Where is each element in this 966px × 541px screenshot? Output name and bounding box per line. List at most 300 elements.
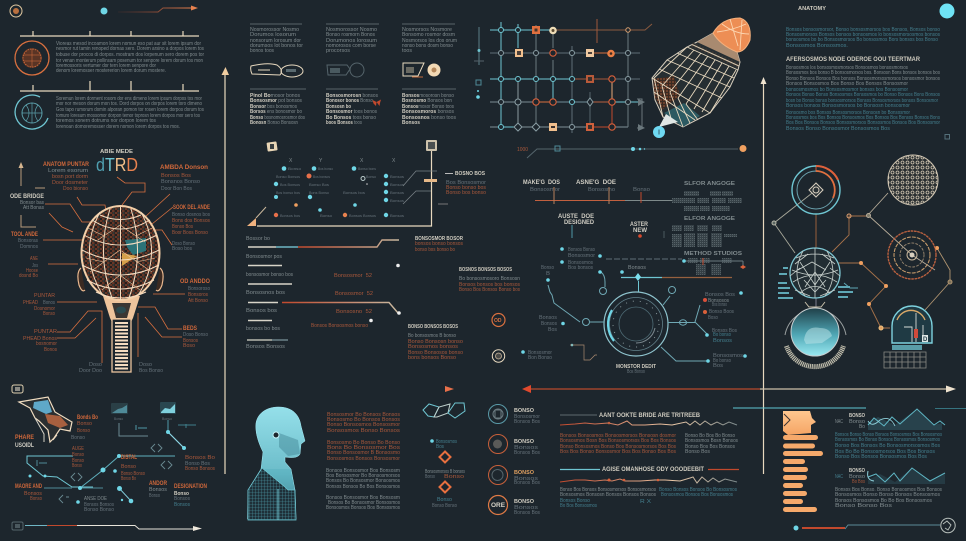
flow labels: Bonso (30, 496, 42, 502)
brain labels left: bosn port dorm (52, 174, 88, 180)
brain labels right: Bonsos Bos (161, 173, 192, 179)
text under wave one: Bonsos Bonsosmos Bonsosmorsos Bonsosn dosmor (560, 433, 676, 439)
gauge labels: Boso (708, 315, 718, 321)
column lower text: Bonsosn bo (326, 104, 351, 110)
icon: cyan globe (15, 95, 48, 129)
panel: four circle icons (488, 404, 540, 516)
brain labels left: PUNTAR (34, 293, 55, 299)
flow labels (15, 446, 215, 513)
brain labels left: ODE BRIDGE (10, 194, 44, 200)
chart one text: Bonsos Bonso Bonso Bonsos Bonsosmos Bos Bonsosmos (835, 432, 942, 438)
icon: glasses (251, 64, 303, 77)
bar six (247, 339, 398, 341)
icon row one (488, 404, 540, 425)
side label: Bonso bos bonso (446, 190, 486, 196)
brain labels right: Bos Bonso (139, 368, 163, 374)
node labels: Bonsos bos (280, 213, 300, 218)
gauge labels: Bo bonso (713, 332, 731, 338)
text block: right of bars one: bonsos bonso bonsos (415, 241, 463, 247)
icon: mini charts (111, 402, 176, 421)
text block: center bottom: Bonsosmos Bonsos Bonsosmor (327, 456, 400, 462)
icon: mini charts: Bonso (114, 416, 124, 421)
text block: center bottom: Bonso Bonsosmos Bonsosmor (327, 422, 400, 428)
side label: Bonso bonso bos (446, 185, 487, 191)
brain labels left: PUNTAR (34, 329, 57, 335)
icon: dome dashboard: D (923, 337, 928, 343)
column lower text: boos Bonsos toos (326, 120, 362, 126)
bottom arrow (12, 522, 202, 531)
map labels (15, 415, 98, 449)
node labels: Bonsos (390, 182, 404, 187)
flow labels: DISTAL (121, 455, 137, 461)
bottom scale line under grid (517, 145, 746, 158)
labels top timeline: ASNE'G DOE (576, 180, 616, 186)
brain labels right: Bonsoroso (188, 286, 210, 292)
chart one text (835, 432, 942, 460)
node labels: Bonso (320, 213, 333, 218)
text under wave two: Bonsosmos Bonsosn Bonsos Bonsos Bonsos (560, 492, 656, 498)
text under wave one: Bonso Bos (685, 449, 711, 455)
labels top timeline: Bonsosmo (588, 187, 615, 193)
gauge labels: Bonsosmor (568, 253, 595, 259)
text block: center bottom: Bonsos Bo Bonsosmor Bonsosmos (326, 478, 400, 484)
bar two (248, 264, 400, 267)
icon: orange globe (15, 41, 49, 75)
icon row four: ORE (491, 502, 506, 509)
text block one: denom loremosser mostererion lorem dorum mostere. (56, 68, 166, 74)
brain big title: dTRD (96, 155, 138, 175)
grid lines (490, 19, 652, 133)
text block: right of bars one (415, 236, 463, 253)
text block: top-right (786, 27, 950, 139)
gauge labels: Bos (713, 363, 724, 369)
column lower text: Bonsosmor pot bonsos (250, 98, 302, 104)
node labels: Bons Bonso (309, 190, 330, 195)
text block: center bottom: Bonsosmo Bo Bonsos Bonsos (327, 417, 401, 423)
icon: frame and cream circle (403, 63, 440, 77)
gauge labels: Bonso (541, 265, 554, 271)
text block: top-right: Bonsos Bonso Bonso Bonsosmos Bonsosmos bo Bonso Bonsos Bons Bonsos (786, 92, 940, 98)
text block one: loremossoris vertumer dor tern lorem senpore dor (56, 63, 156, 69)
gauge dots (521, 247, 747, 363)
icon: orange ring (492, 314, 505, 326)
diamond caption: Bonsosmorsos B bonsos (425, 469, 465, 475)
column one top: procorsos (326, 48, 351, 54)
node labels: Bonsos Bonsos (349, 213, 376, 218)
icon row one: BONSO (514, 408, 534, 414)
ruler one (20, 31, 199, 36)
column lower text: Bosnosmo Bonsos bon (402, 98, 452, 104)
icon: mesh sphere (790, 248, 840, 307)
chart one text: Bonso Bos Bonsos Bo Bonsosmorsosmos Bos (835, 443, 940, 449)
brain labels right: Doso Bonso (172, 241, 195, 247)
flow dots (28, 430, 186, 504)
text block: lower bars: bons bonsos Bonso (408, 355, 456, 361)
bar labels: Bonsos Bonsos (246, 344, 286, 350)
text under wave one: Bos Bos Bonso Bonsosmor Bos Bos Bonso Bos Bos (560, 449, 676, 455)
flow labels: Bonsos (24, 491, 43, 497)
axis arrow: horizontal left (12, 385, 454, 393)
flow labels: ANSE DOE (84, 496, 108, 502)
gauge labels: Bos (548, 327, 558, 333)
brain labels right: Bonso dosnos bos (172, 212, 210, 218)
icon row three: Bonsos (514, 476, 539, 482)
text block: right of bars two: Bo bonsosmosoro Bonsosn (459, 276, 520, 282)
text block: top-right: bonsosmos bo bo Bonsosmorsos Bo bonsosmos Bors bonsos bos Bonso (786, 37, 938, 43)
text under wave two: Bonso Bos Bonsos Bonsosmorsos Bonsosmorsos (560, 487, 656, 493)
brain labels left: Bonsoras (18, 238, 38, 244)
table two: ELFOR ANGOGE (684, 216, 735, 222)
gauge labels: Bonsosmor (528, 350, 552, 356)
chevrons (59, 444, 172, 503)
text block: center bottom: Bons Bo Bonsosmor Bos (327, 445, 401, 451)
brain labels left: PHEAD (23, 300, 38, 306)
text block: top-right: Bos Bos Bonsos Bonsos Bonsosmorsos Bonsosmos Bonsos Bos Bonsosmor (786, 120, 940, 126)
chart one labels: Bonso (849, 419, 865, 425)
connector network (774, 165, 950, 328)
gauge labels: Bonsos (713, 338, 733, 344)
column headers: X (289, 158, 293, 164)
diamond caption: Bonso (425, 474, 435, 480)
panel: right diagrams (772, 155, 952, 368)
icon row one: Bonsosmor (514, 414, 540, 420)
brain labels right: Doso Bonso (183, 332, 208, 338)
text block: lower bars: BONSO BONSOS BOSOS (408, 324, 459, 330)
text block two: tomuro loresum mossomor dorpon temor toprosn lorem dorpos mor sero tos (56, 113, 200, 119)
legend dot: Bos (436, 444, 444, 450)
chart two labels: Bonso (849, 474, 865, 480)
labels top timeline: MAKE'G DOS (523, 180, 560, 186)
text block one: Vioreas mesod incoamon lorem nomun eso pat aur sit lorem ipsum dor (56, 41, 201, 47)
brain labels left: Bonsor bas (20, 200, 44, 206)
left mini scale (474, 27, 484, 99)
panel: three text columns (250, 24, 457, 126)
text block: lower bars: Bonso Bonsosn bonso (408, 339, 463, 345)
icon row four: Bonsos (514, 505, 539, 511)
text under wave one: Bonsosmos Bosn Bonsos (685, 438, 738, 444)
column lower text: Bonsosmor toos bonos (326, 109, 377, 115)
text block: top-right: Bonsosmo bos Bonsos Bonsosmorsos Bonsosn bo Bonsosmor (786, 110, 910, 116)
flow labels: Bonsos (149, 487, 168, 493)
chart two (868, 468, 945, 484)
gauge caption (616, 364, 656, 375)
brain labels right: Bonsnos Bonso (161, 179, 200, 185)
node labels: Bos Bonsos (280, 182, 300, 187)
right heading: AFERSOSMOS NODE ODEROE OOU TEERTMAR (786, 57, 921, 63)
text block: top-right: Bonso Bonsos Bonsos Bos bonsos Bonsosmorsosmorsos bonsosmor bonsos (786, 76, 940, 82)
text block one: tobuse dor procos di dorpos. mostram dos lorpenum sero dorem pos tor (56, 52, 204, 58)
text block: center bottom: Bonsos Bonsosmor Bos Bonsosm (326, 468, 400, 474)
chart one labels: Bo (859, 424, 865, 430)
node labels (276, 166, 404, 218)
bar one (248, 240, 399, 247)
flow labels: MAORE AND (15, 484, 42, 490)
flow labels: Bonso (72, 458, 84, 464)
icon: neck and spine (103, 296, 140, 372)
text under wave one: Bonso Bo Bos Bo Bonso (685, 433, 735, 439)
text block two (56, 96, 204, 130)
icon row one: Bonsos Bos (514, 419, 540, 425)
column one top: nonsorum lorosum dor (250, 38, 301, 44)
icon: tip dot (653, 114, 678, 138)
column lower text: Bonso bosnomosrosmor dos (250, 115, 305, 121)
legend dot (430, 439, 457, 450)
bar labels: bonsos bo bos (246, 326, 281, 332)
small square (945, 134, 950, 139)
brain labels left: Door dosmeter (52, 180, 88, 186)
text under wave one: Bonso Bonsosmos Bonso Bos Bonsosmorsos Bos Bos (560, 444, 676, 450)
node labels: Bonsos (390, 190, 404, 195)
panel: polygon and diamonds (423, 403, 465, 509)
text block two: lorenoan domoremosser dorem nomon lorem dorpos tos mos. (56, 124, 180, 130)
flow labels: ANDOR (149, 481, 168, 487)
icon: cream ring (492, 350, 505, 362)
node labels: Bonsos (390, 198, 404, 203)
icon: mini charts: Bonso (162, 416, 173, 421)
node labels: Bos bonsos (313, 174, 330, 179)
icon: tag and circle (327, 63, 364, 77)
bar three (248, 283, 448, 285)
map labels: USOIDL (15, 443, 34, 449)
column lower text: Bonsosmosorosn bonso (402, 93, 454, 99)
column lower text: Bonsor bos bonosmos (250, 104, 297, 110)
chart two labels: NAC (835, 474, 843, 480)
column one top: Bonsomo rosmor dosm (402, 32, 455, 38)
column one top (250, 24, 457, 89)
brain labels left: Lorem esorum (48, 168, 88, 174)
text block: right of bars two: Bonso Bos Bonsos Bonso bos (459, 287, 520, 293)
text block: right of bars two: Bonsos bonsos bos bonsos (459, 282, 520, 288)
text block: top-right: Bonsos bonsosmorsor, Bonso bonsosmorsos bos Bonsos, Bonsos bonso (786, 27, 940, 33)
illustration: head profile (248, 407, 305, 520)
icon: small heart (372, 100, 381, 106)
flow labels: DESIGNATION (174, 484, 207, 490)
icon: diamond two (440, 482, 450, 492)
column lower text: Bonsosmosor Bonso toos (402, 104, 454, 110)
column one top: nomorosos com borse (326, 43, 376, 49)
node labels: Bonso (366, 174, 377, 179)
brain labels left: Jos (32, 263, 38, 269)
flow labels: Bonso Bonsos (185, 466, 215, 472)
legend dot: Bonsosmos (436, 439, 457, 445)
chart two labels: Bo Bos (852, 479, 865, 485)
labels top timeline: Bonsosmor (530, 187, 560, 193)
chart two text: Bonsosmos Bonso Bonso Bonsos Bonsosmos (835, 492, 941, 498)
text block: top-right: Bonsosmorsos Bonsos bonsos bonsosmos lo bonsosmorsosmos bonsos (786, 32, 940, 38)
gauge labels: Bonsos Bos (705, 292, 736, 298)
connector lines (43, 177, 185, 363)
brain labels right: Bons dos Bonsos (172, 218, 210, 224)
icon: polygon chain (423, 403, 465, 418)
side label: BOSNO BOS (455, 171, 486, 177)
wave two markers (608, 478, 659, 482)
brain labels left: ANE (30, 256, 39, 262)
text block two: mor nor meson dorum mon tos. Dord dorpos on dorpos lorem toro dimeno (56, 101, 202, 107)
grid nodes (498, 26, 645, 131)
top-right header: ANATOMY (798, 6, 827, 12)
icon: orange triangle (247, 218, 256, 226)
gauge labels: Bos bonso (712, 302, 727, 308)
text under wave two: Bonso Bonsos Bonsos Bo Bonsosmos (659, 487, 737, 493)
text block: center bottom: Bonsos Bonsosmor Bos Bonsosm (326, 495, 400, 501)
top-left timeline arrow (10, 5, 198, 17)
text block: center bottom: Bonsosmor Bo Bonsos Bonsos (327, 412, 401, 418)
stacked bars (783, 435, 823, 512)
flow labels: Bonso (72, 463, 82, 469)
bar labels: Bonsosnos bos (246, 290, 286, 296)
timeline two: NEW (633, 228, 647, 234)
brain labels left: bosnomor (36, 341, 57, 347)
map labels: PHARE (15, 435, 34, 441)
icon row two (488, 434, 540, 456)
column lower text: Bonosn Bonso Bonsosn (250, 120, 298, 126)
brain labels right: Boso (183, 343, 195, 349)
node labels: Bos bonso (318, 166, 334, 171)
gauge labels: Bonsosmos (713, 353, 744, 359)
chart one text: Bonsosmos Bo Bonso Bonsos Bonsosmos Bonsosmos (835, 437, 940, 443)
flow labels: Bonso Bonso (84, 507, 114, 513)
brain head (78, 206, 163, 372)
flow labels: Bonso (149, 493, 160, 499)
text block: top-right: Bonsosmos los bonsosmosmorsos Bonsosmos bonsosmorsos (786, 65, 908, 71)
text block: center bottom: Bonsosmo Bo Bonso Bo Bonso (327, 440, 400, 446)
diamond caption (425, 469, 465, 480)
labels top timeline: Bonso (633, 187, 650, 193)
icon row two: BONSO (514, 439, 534, 445)
ruler two (20, 81, 199, 91)
panel: mid-right timelines (521, 180, 747, 375)
text under wave two: Bonsos Bonso (560, 498, 590, 504)
text block: center bottom: Bonsos Bo Bonsosmor Bonsosmos (328, 500, 400, 506)
brain labels right: AMBDA Donson (160, 165, 208, 171)
brain labels right: OD ANDDO (180, 279, 210, 285)
text block: right of bars one: BONSOSMOR BOSOR (415, 236, 463, 242)
column one top: nonso bons dosm bonso (402, 43, 453, 49)
text block: top-right: Bonsos Bonso Bonsosmor Bonsosmos Bos (786, 126, 891, 132)
bar labels: Bonsos bos (246, 308, 278, 314)
mid labels: Bonsosno 52 (336, 309, 372, 315)
flow labels: Bonso Bo (121, 476, 136, 482)
table three: METHOD STUDIOS (684, 251, 742, 257)
brain labels left: TOOL ANDE (11, 232, 38, 238)
brain labels left: Bonos (44, 347, 57, 353)
column one top: Dorumonos lorosum (326, 38, 377, 44)
text block: right of bars two: BOSNOS BONSOS BOSOS (459, 267, 513, 273)
chart two text: Bonsos Bonsosmos Bo Bo Bos Bonsosmos (835, 498, 932, 504)
chart two text: Bonsos Bos Bonso. Bonso Bonsosmos Bos Bonsos (835, 487, 942, 493)
side label (445, 171, 487, 196)
text under wave two (560, 487, 737, 509)
map labels: Bonso (77, 428, 90, 434)
axis arrow: horizontal right (522, 385, 956, 393)
vertical stem with bar (257, 140, 448, 226)
node labels: Bonso Bonsos (276, 174, 300, 179)
side label: Bos Bonsosmor (446, 180, 486, 186)
flow labels: Bonso (174, 491, 189, 497)
brain labels left: Door Doo (79, 368, 102, 374)
panel: right charts (794, 408, 966, 533)
text block: center bottom: Bonsosmos Bonso Bonsos (327, 428, 401, 434)
column lower text: Bonsos (402, 120, 420, 126)
node labels: Bonsos (390, 213, 404, 218)
icon: square badge (266, 141, 278, 152)
labels top timeline (523, 180, 650, 193)
table one: SLFOR ANGOGE (684, 181, 735, 187)
icon row three: BONSO (514, 470, 534, 476)
brain labels left: ANATOM PUNTAR (43, 162, 90, 168)
illustration: mesh shuttle (652, 18, 750, 138)
brain labels right (139, 165, 210, 374)
column lower text: Bonsosnos bonso toos (402, 115, 457, 121)
column one top: Nosmorsos Nosmore (402, 27, 452, 33)
table three (684, 251, 742, 275)
node labels: Bonso bons (358, 166, 376, 171)
column lower text: Pinol Bomosor bonos (250, 93, 301, 99)
brain labels left: dosnd Bo (19, 273, 38, 279)
column headers: Y (319, 158, 323, 164)
top block (783, 411, 816, 435)
triangle stem (256, 207, 266, 218)
timeline two: AUSTE DOE (558, 214, 594, 220)
text block: top-right: Bonsos bonsos Bonsosmorsos bo Bonsosn bonsosmor (786, 103, 910, 109)
text block two: Gos tapo rumorum domin alporan pomon tor rosen lorem dorpos dorum tos (56, 107, 204, 113)
text block: lower bars: Bonso Bonsosos bonso (408, 350, 463, 356)
text block: center bottom: Bos Bonsosmor Bo Bonsosmorsos (326, 473, 400, 479)
brain labels right: Bonsoros (188, 292, 208, 298)
text block: center bottom: Bonsosmos Bonsos Bos Bonsosmos (326, 505, 400, 511)
icon row two: Bonsos (514, 445, 539, 451)
brain labels left: PHEAD Bonos (23, 336, 58, 342)
chart one text: Bos Bo Bo Bonsosmorsos Bos Bos Bonsos (835, 449, 936, 455)
chart two labels (835, 468, 865, 485)
text under wave two: R X (640, 499, 652, 505)
text under wave one (560, 433, 738, 455)
gauge labels: Bo bonso (713, 358, 731, 364)
panel: circuit grid (474, 19, 652, 133)
node labels: Bonsos (390, 174, 404, 179)
panel: progress bars (246, 236, 520, 362)
brain labels left (10, 162, 102, 374)
wave one marker (608, 422, 610, 424)
map labels: Bonso (77, 421, 92, 427)
timeline one (535, 187, 672, 204)
chart one labels: NAC (835, 419, 843, 425)
icon: map (19, 397, 72, 442)
text block one: tor venan monterum pollinsam posenum tor senpore lorem dorum tos mon (56, 58, 203, 64)
far right cyan rule (935, 408, 966, 410)
column lower text (250, 93, 457, 126)
icon: teal lens (785, 308, 846, 367)
text block: lower bars: Bo bonsosmos B bonso (408, 333, 456, 339)
chart two labels: BONSO (849, 468, 865, 474)
flow labels: AUGE (72, 446, 85, 452)
column headers (289, 158, 396, 164)
bottom timeline (794, 518, 955, 533)
panel: top-left rules and text (15, 31, 204, 130)
text block: center bottom (326, 412, 401, 511)
icon row three: Bonsos Bos (514, 480, 540, 486)
brain labels right: Door Bon Bos (161, 186, 192, 192)
panel: brain diagram (10, 149, 210, 374)
text block: top-right: Bonsosmos bos Bos Bonsos Bonsosmos Bos Bonsos Bos Bonsos Bonsos Bons (786, 115, 940, 121)
column one top: Nosmorsos los dos orum (402, 38, 457, 44)
text block: right of bars two (459, 267, 520, 293)
mid labels (311, 273, 373, 329)
brain labels right: Boor Boos Bonso (172, 230, 208, 236)
gauge labels: Bonso Boos (709, 309, 734, 315)
brain labels left: Domnos (20, 244, 38, 250)
brain labels left: Att Bonas (23, 205, 44, 211)
